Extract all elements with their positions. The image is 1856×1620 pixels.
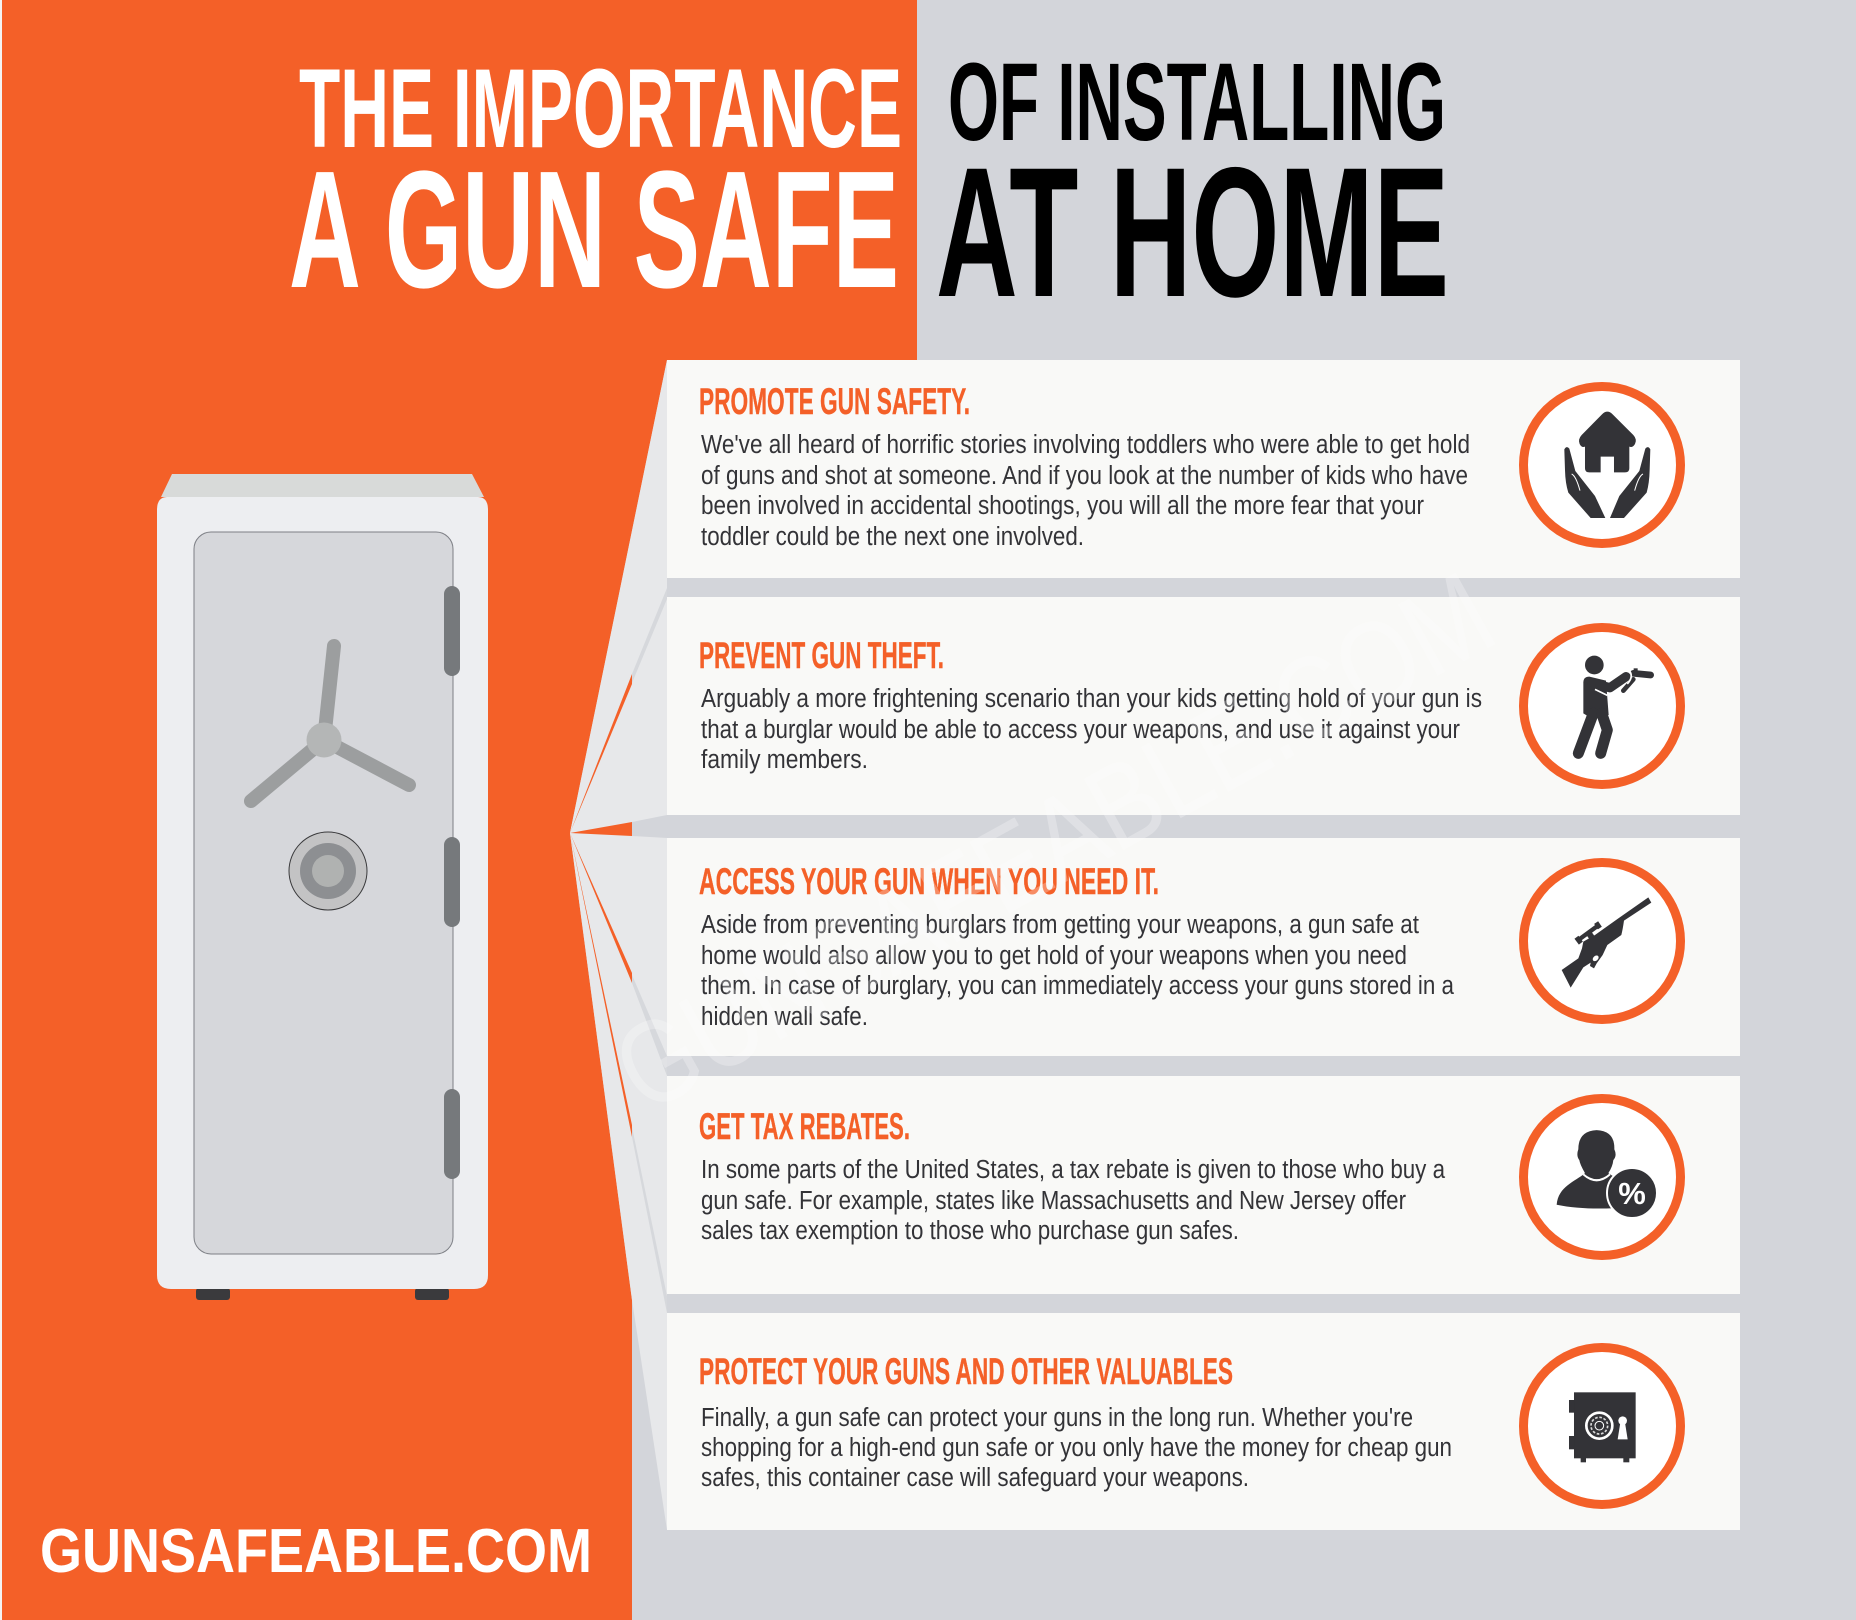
icon: small safe bbox=[1524, 1348, 1680, 1504]
text: promote gun safety: toddler could be the next one involved. bbox=[701, 523, 1084, 551]
text: access your gun bbox=[701, 911, 1455, 1031]
title bbox=[289, 41, 1449, 336]
orange background panel bbox=[2, 0, 917, 1620]
text: access your gun: hidden wall safe. bbox=[701, 1003, 868, 1031]
text: get tax rebates: In some parts of the United States, a tax rebate is given to those who buy a bbox=[701, 1156, 1446, 1184]
connector fan from safe to panels bbox=[570, 360, 667, 1530]
text: promote gun safety: been involved in accidental shootings, you will all the more fear that your bbox=[701, 492, 1424, 520]
text: access your gun: Aside from preventing burglars from getting your weapons, a gun safe at bbox=[701, 911, 1419, 939]
text: promote gun safety: of guns and shot at someone. And if you look at the number of kids who have bbox=[701, 462, 1468, 490]
text: prevent gun theft bbox=[701, 685, 1482, 774]
text: promote gun safety: We've all heard of horrific stories involving toddlers who were able to get hold bbox=[701, 431, 1470, 459]
icon: rifle bbox=[1524, 862, 1680, 1020]
panel: get tax rebates bbox=[667, 1076, 1740, 1294]
text: protect your guns: Finally, a gun safe can protect your guns in the long run. Whether you're bbox=[701, 1404, 1413, 1432]
panel: promote gun safety bbox=[667, 360, 1740, 578]
text: get tax rebates bbox=[701, 1156, 1446, 1245]
panel: prevent gun theft bbox=[667, 597, 1740, 815]
icon: person aiming gun bbox=[1524, 628, 1680, 784]
icon: person with percent badge: % bbox=[1618, 1176, 1646, 1211]
panel: access your gun bbox=[667, 838, 1740, 1056]
text: prevent gun theft: Arguably a more frightening scenario than your kids getting hold of your gun is bbox=[701, 685, 1482, 713]
text: protect your guns: shopping for a high-end gun safe or you only have the money for cheap gun bbox=[701, 1434, 1452, 1462]
title: AT HOME bbox=[936, 130, 1449, 336]
text: prevent gun theft: family members. bbox=[701, 746, 868, 774]
icon: person with percent badge bbox=[1524, 1098, 1680, 1256]
heading: access your gun: ACCESS YOUR GUN WHEN YOU NEED IT. bbox=[699, 861, 1159, 902]
text: get tax rebates: sales tax exemption to those who purchase gun safes. bbox=[701, 1217, 1239, 1245]
text: protect your guns bbox=[701, 1404, 1452, 1492]
heading: protect your guns: PROTECT YOUR GUNS AND OTHER VALUABLES bbox=[699, 1351, 1233, 1392]
title: A GUN SAFE bbox=[289, 137, 899, 323]
heading: promote gun safety: PROMOTE GUN SAFETY. bbox=[699, 381, 970, 422]
heading: get tax rebates: GET TAX REBATES. bbox=[699, 1106, 910, 1147]
icon: hands holding house bbox=[1524, 386, 1680, 544]
text: access your gun: home would also allow you to get hold of your weapons when you need bbox=[701, 942, 1407, 970]
text: get tax rebates: gun safe. For example, states like Massachusetts and New Jersey offer bbox=[701, 1187, 1406, 1215]
footer site name: GUNSAFEABLE.COM bbox=[40, 1517, 592, 1586]
title: OF INSTALLING bbox=[948, 41, 1446, 164]
text: protect your guns: safes, this container case will safeguard your weapons. bbox=[701, 1464, 1249, 1492]
illustration: gun safe bbox=[157, 474, 488, 1300]
title: THE IMPORTANCE bbox=[299, 46, 902, 171]
text: access your gun: them. In case of burglary, you can immediately access your guns stored in a bbox=[701, 972, 1455, 1000]
watermark: GUNSAFEABLE.COM bbox=[594, 547, 1515, 1138]
heading: prevent gun theft: PREVENT GUN THEFT. bbox=[699, 635, 944, 676]
text: prevent gun theft: that a burglar would be able to access your weapons, and use it against your bbox=[701, 716, 1460, 744]
text: promote gun safety bbox=[701, 431, 1470, 551]
panel: protect your guns and other valuables bbox=[667, 1313, 1740, 1530]
